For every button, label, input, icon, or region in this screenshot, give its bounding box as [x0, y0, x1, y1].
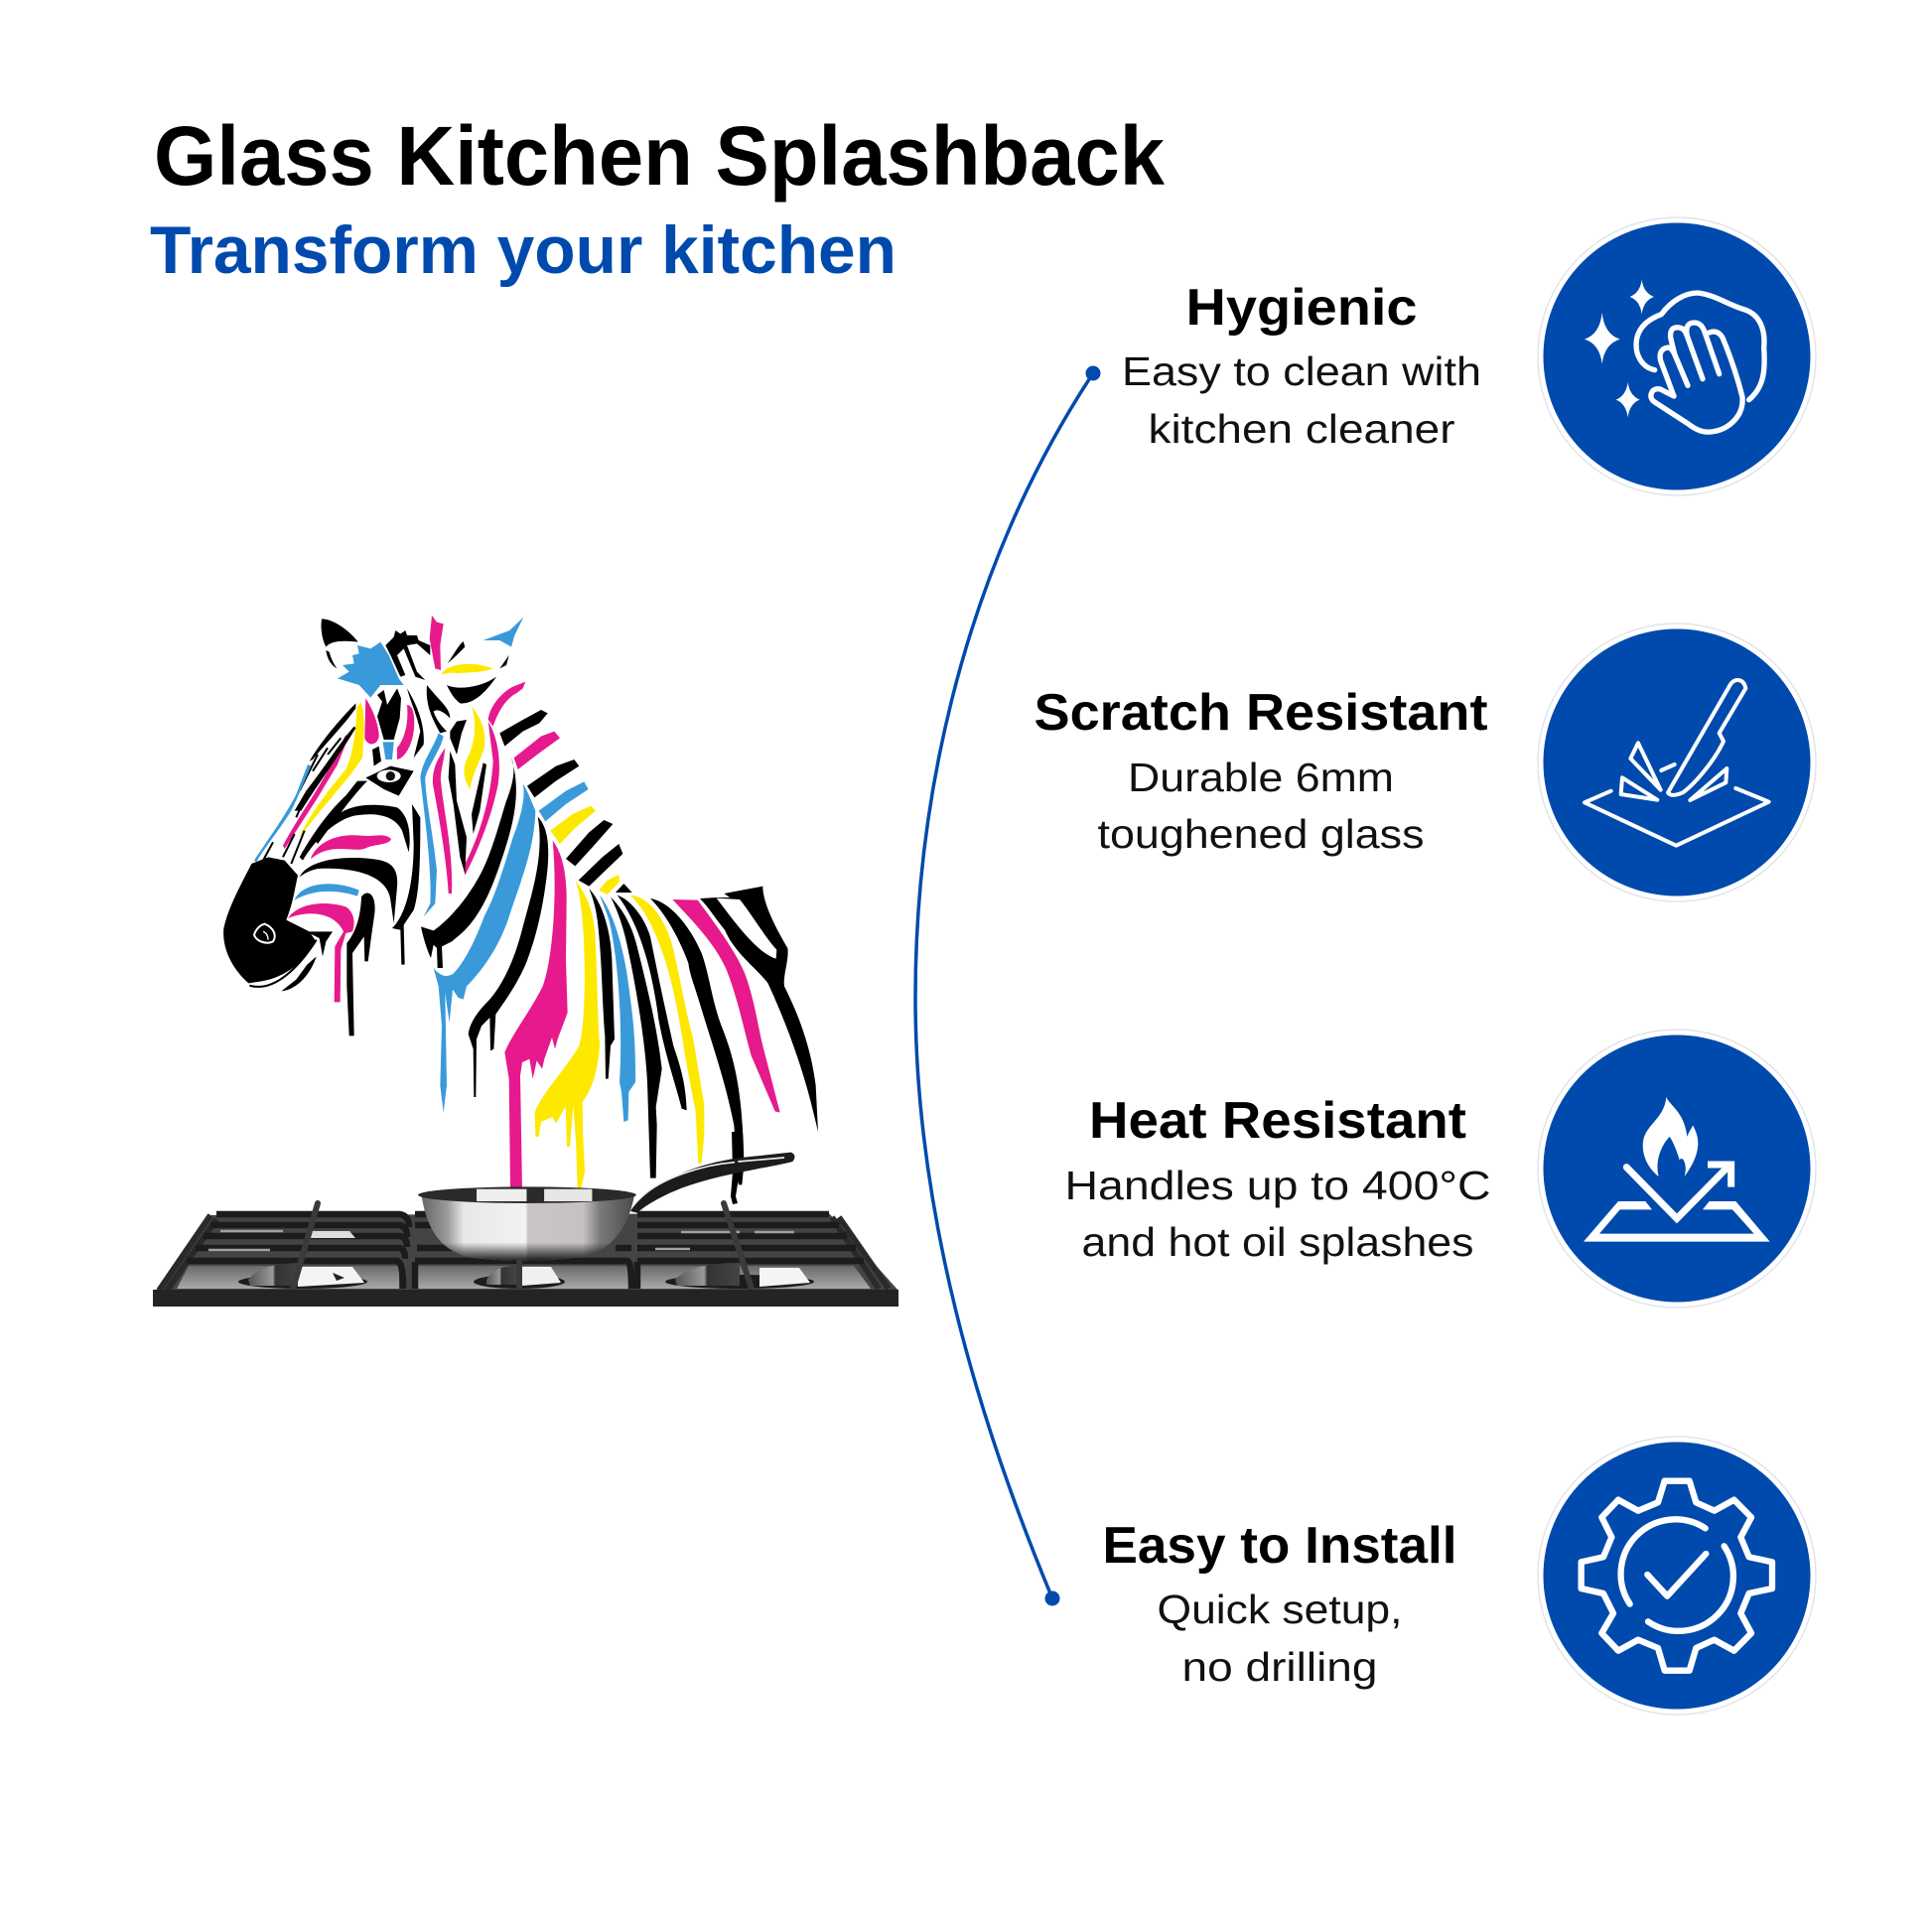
zebra body and paint drips	[421, 710, 818, 1189]
burner plates	[177, 1266, 399, 1289]
icon: gear with check mark	[1538, 1437, 1816, 1715]
feature: heat resistant: and hot oil splashes	[1082, 1219, 1473, 1265]
title: Glass Kitchen Splashback	[154, 109, 1165, 203]
feature: hygienic: kitchen cleaner	[1148, 406, 1455, 452]
hob frame edges	[159, 1215, 889, 1291]
feature: heat resistant: Heat Resistant	[1089, 1092, 1466, 1150]
illustration: dripping CMYK zebra	[223, 616, 818, 1189]
zebra head	[223, 616, 525, 1035]
hob front edge	[153, 1290, 898, 1307]
illustration: gas hob	[153, 1203, 898, 1307]
feature: easy to install	[1102, 1517, 1457, 1690]
grate highlights	[208, 1231, 794, 1250]
feature: scratch resistant: toughened glass	[1098, 811, 1424, 857]
feature: hygienic	[1122, 279, 1481, 452]
burners	[238, 1231, 814, 1289]
feature: scratch resistant: Durable 6mm	[1128, 755, 1394, 800]
curved connector line	[915, 365, 1100, 1606]
feature: scratch resistant	[1035, 684, 1487, 857]
icon: hand wiping with sparkles	[1538, 217, 1816, 495]
black paint drip behind handle	[731, 1132, 743, 1204]
subtitle: Transform your kitchen	[150, 212, 897, 288]
feature: hygienic: Hygienic	[1185, 279, 1418, 337]
hob frame	[161, 1213, 898, 1291]
feature: heat resistant: Handles up to 400°C	[1064, 1163, 1491, 1208]
feature: hygienic: Easy to clean with	[1122, 348, 1481, 394]
feature: scratch resistant: Scratch Resistant	[1035, 684, 1487, 742]
icon: flame over heat-reflecting surface	[1538, 1030, 1816, 1308]
feature: easy to install: Easy to Install	[1102, 1517, 1457, 1575]
pan bowl	[418, 1186, 636, 1261]
feature: heat resistant	[1064, 1092, 1491, 1265]
illustration: frying pan	[418, 1132, 794, 1261]
feature: easy to install: no drilling	[1181, 1644, 1378, 1690]
pan handle	[630, 1153, 794, 1213]
grate bars	[187, 1214, 864, 1289]
feature: easy to install: Quick setup,	[1158, 1587, 1402, 1632]
icon: knife scratching glass	[1538, 623, 1816, 901]
grate supports	[293, 1203, 752, 1289]
